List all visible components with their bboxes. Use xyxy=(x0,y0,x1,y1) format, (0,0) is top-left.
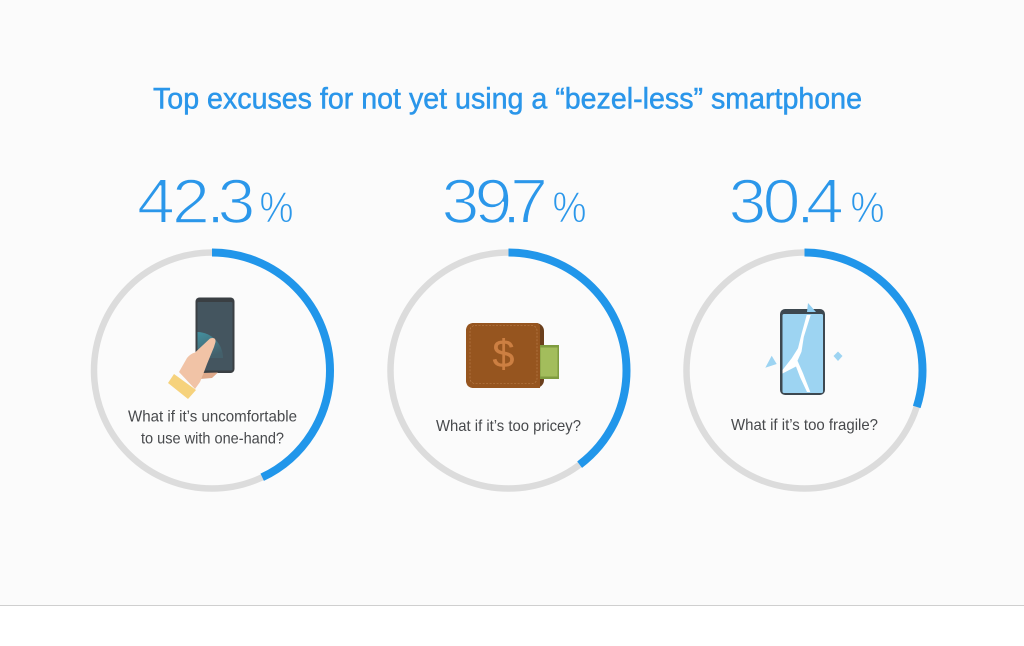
percentage: 42.3%: % xyxy=(260,183,294,232)
icon: hand holding phone xyxy=(168,298,234,399)
percentage: 39.7%: 39.7 xyxy=(442,166,548,236)
panel: fragility excuse xyxy=(686,166,922,488)
panel: price excuse xyxy=(390,166,626,488)
percentage: 30.4%: 30.4 xyxy=(728,166,844,236)
percentage: 30.4%: % xyxy=(850,183,884,232)
icon: wallet: $ xyxy=(493,333,515,376)
title: Top excuses for not yet using a “bezel-less” smartphone xyxy=(153,82,862,116)
question text: What if it’s too pricey? xyxy=(436,418,581,435)
icon: cracked phone xyxy=(765,303,842,395)
panel: one-hand excuse xyxy=(94,166,330,488)
question text: What if it’s uncomfortable xyxy=(128,408,297,426)
percentage: 42.3%: 42.3 xyxy=(137,166,255,236)
question text xyxy=(128,408,297,448)
donut ring: 42.3% xyxy=(94,252,330,488)
icon: wallet xyxy=(466,323,559,388)
question text: to use with one-hand? xyxy=(141,430,284,448)
donut ring: 39.7% xyxy=(390,252,626,488)
donut ring: 30.4% xyxy=(686,252,922,488)
question text: What if it’s too fragile? xyxy=(731,417,878,434)
percentage: 39.7%: % xyxy=(552,183,586,232)
